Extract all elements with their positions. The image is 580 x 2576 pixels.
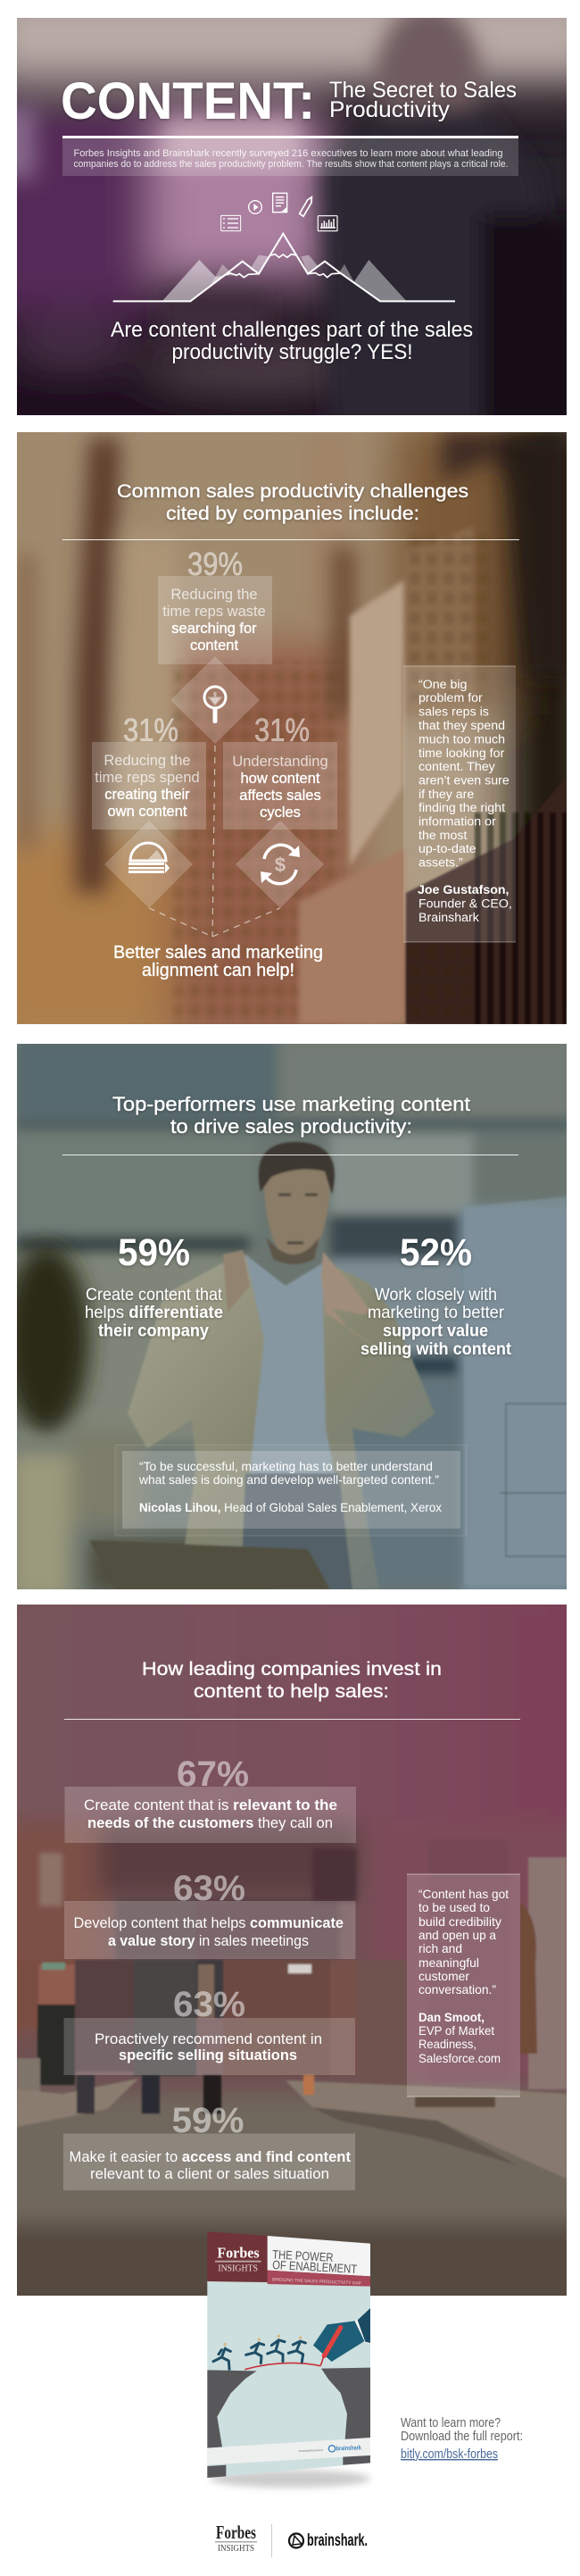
intro text box: Forbes Insights and Brainshark recently surveyed 216 executives to learn more about what leading: [73, 148, 503, 159]
quote: Dan Smoot: Dan Smoot,: [418, 2010, 485, 2024]
stat 67%: Create content that is relevant to the: [84, 1797, 337, 1813]
icon diamond: dollar cycle: [236, 821, 324, 908]
stat 52%: [360, 1231, 512, 1359]
logo: brainshark: brainshark.: [307, 2531, 368, 2550]
quote: Joe Gustafson: Brainshark: [418, 911, 480, 925]
cover header: [207, 2231, 370, 2287]
stat 39% searching for content: searching for: [171, 621, 257, 637]
stat 63% selling situations: specific selling situations: [119, 2047, 297, 2063]
stat 39% searching for content: time reps waste: [162, 604, 266, 620]
panel: common challenges: [17, 432, 567, 1024]
quote: Joe Gustafson: Joe Gustafson,: [418, 883, 509, 897]
logo: Forbes Insights: Forbes: [216, 2522, 256, 2543]
stat 67%: needs of the customers they call on: [87, 1814, 333, 1831]
stat 67%: 67%: [177, 1755, 249, 1794]
cover header: INSIGHTS: [218, 2263, 258, 2273]
stat 52%: Work closely with: [375, 1286, 497, 1305]
stat 63% selling situations: 63%: [173, 1985, 245, 2024]
dashed connectors: [149, 746, 280, 937]
pen hand: [313, 2308, 370, 2365]
invest heading: content to help sales:: [194, 1681, 389, 1702]
stat 59%: 59%: [118, 1231, 190, 1274]
quote: Dan Smoot: meaningful: [418, 1955, 479, 1970]
cover header: Forbes: [217, 2244, 260, 2261]
intro text box: companies do to address the sales productivity problem. The results show that content plays a critical role.: [73, 159, 509, 170]
stat 63% selling situations: [64, 1985, 355, 2075]
stat 52%: marketing to better: [368, 1304, 505, 1322]
quote: Dan Smoot: Salesforce.com: [418, 2051, 501, 2065]
logo: brainshark: [289, 2531, 368, 2550]
stat 63% value story: Develop content that helps communicate: [73, 1914, 344, 1931]
panel: intro hero: [17, 18, 567, 415]
cover shadow: [210, 2470, 370, 2488]
stat 63% value story: 63%: [173, 1869, 245, 1908]
stat 31% creating content: time reps spend: [95, 770, 200, 786]
icon diamond: dollar cycle: $: [275, 854, 286, 876]
quote: Joe Gustafson: “One big: [418, 678, 467, 692]
stat 31% content and sales cycles: 31%: [254, 712, 310, 748]
quote: Dan Smoot: customer: [418, 1969, 469, 1983]
quote: Joe Gustafson: information or: [418, 814, 496, 829]
quote: Dan Smoot: [407, 1874, 520, 2097]
stat 31% creating content: Reducing the: [104, 753, 191, 769]
quote: Joe Gustafson: if they are: [418, 788, 474, 802]
stat 59%: Create content that: [86, 1286, 223, 1305]
cover footer band: brainshark: [336, 2445, 361, 2452]
challenges heading: cited by companies include:: [166, 504, 419, 524]
invest heading: [142, 1659, 442, 1702]
quote: Joe Gustafson: much too much: [418, 732, 505, 746]
challenges photo background: [17, 432, 567, 1024]
stat 31% content and sales cycles: how content: [241, 771, 320, 787]
quote: Joe Gustafson: aren’t even sure: [418, 773, 510, 788]
intro question: [111, 318, 473, 364]
stat 59%: [85, 1231, 223, 1341]
stat 67%: [64, 1755, 356, 1843]
mountains back triangles: [162, 255, 407, 301]
icon: chart: [318, 216, 337, 231]
running figures: [213, 2340, 305, 2369]
invest rule: [64, 1719, 520, 1720]
stat 63% value story: [64, 1869, 355, 1959]
quote: Joe Gustafson: finding the right: [418, 801, 505, 815]
quote: Joe Gustafson: the most: [418, 829, 467, 843]
top performers heading: Top-performers use marketing content: [112, 1093, 470, 1115]
runner heads: [224, 2335, 302, 2346]
stat 31% content and sales cycles: cycles: [260, 804, 301, 821]
logo: Forbes Insights: [215, 2522, 257, 2554]
cover header: OF ENABLEMENT: [272, 2258, 358, 2276]
icon diamond: clock and pencil: [104, 821, 193, 908]
quote: Dan Smoot: “Content has got: [418, 1887, 509, 1901]
stat 59% access and find: Make it easier to access and find content: [70, 2148, 351, 2165]
icon diamond: magnifier: [170, 656, 260, 744]
presenter photo background: [4, 1040, 571, 1603]
download call to action: [401, 2416, 523, 2462]
quote: Joe Gustafson: problem for: [418, 691, 483, 705]
stat 31% content and sales cycles: Understanding: [232, 754, 328, 770]
stat 52%: selling with content: [360, 1340, 512, 1359]
quote: Dan Smoot: build credibility: [418, 1914, 501, 1929]
cover header: BRIDGING THE SALES PRODUCTIVITY GAP: [272, 2277, 362, 2287]
cover body: [207, 2280, 370, 2478]
challenges rule: [62, 539, 519, 540]
quote: Joe Gustafson: [403, 666, 516, 942]
quote: Nicolas Lihou: what sales is doing and develop well-targeted content.”: [138, 1472, 439, 1487]
cover header: THE POWER: [272, 2247, 334, 2264]
intro rule: [62, 136, 518, 138]
quote: Nicolas Lihou: “To be successful, marketing has to better understand: [139, 1459, 433, 1473]
quote: Joe Gustafson: time looking for: [418, 746, 504, 761]
logo divider: [271, 2524, 272, 2557]
title CONTENT: [61, 72, 517, 130]
quote: Joe Gustafson: up-to-date: [418, 842, 476, 856]
alignment message: [113, 943, 323, 980]
stat 31% creating content: creating their: [104, 787, 190, 803]
quote: Joe Gustafson: content. They: [418, 760, 496, 774]
stat 39% searching for content: 39%: [187, 546, 243, 582]
stat 39% searching for content: content: [190, 638, 238, 654]
stat 59%: their company: [98, 1321, 209, 1341]
cover footer band: IN ASSOCIATION WITH: [299, 2448, 323, 2453]
intro blurred photo background: [17, 18, 567, 415]
stat 31% creating content: [92, 712, 206, 829]
quote: Dan Smoot: to be used to: [418, 1900, 490, 1914]
stat 39% searching for content: [158, 546, 272, 664]
quote: Dan Smoot: conversation.”: [418, 1982, 496, 1997]
stat 31% content and sales cycles: [223, 712, 337, 829]
alignment message: Better sales and marketing: [113, 943, 323, 963]
title CONTENT: The Secret to Sales: [329, 78, 517, 103]
invest heading: How leading companies invest in: [142, 1659, 442, 1680]
icon: list: [221, 215, 241, 231]
stat 59%: helps differentiate: [85, 1304, 223, 1322]
icon: play: [249, 201, 261, 213]
stat 59% access and find: 59%: [171, 2101, 244, 2140]
logo: Forbes Insights: INSIGHTS: [218, 2543, 254, 2554]
cover footer band: [207, 2438, 370, 2478]
intro question: Are content challenges part of the sales: [111, 318, 473, 342]
cover cliffs: [207, 2368, 370, 2448]
quote: Joe Gustafson: assets.”: [418, 855, 463, 870]
quote: Nicolas Lihou: Nicolas Lihou, Head of Global Sales Enablement, Xerox: [139, 1500, 442, 1514]
challenges heading: [117, 481, 468, 524]
title CONTENT: Productivity: [329, 97, 451, 122]
stat 31% creating content: 31%: [123, 712, 178, 748]
quote: Joe Gustafson: that they spend: [418, 719, 505, 733]
stat 52%: 52%: [400, 1231, 472, 1274]
alignment message: alignment can help!: [142, 961, 294, 980]
stat 63% selling situations: Proactively recommend content in: [95, 2030, 322, 2047]
quote: Dan Smoot: Readiness,: [418, 2037, 476, 2051]
challenges heading: Common sales productivity challenges: [117, 481, 468, 502]
download call to action: Download the full report:: [401, 2430, 523, 2444]
icon: pencil: [300, 197, 311, 216]
stat 59% access and find: [63, 2101, 355, 2190]
stat 31% content and sales cycles: affects sales: [239, 788, 321, 804]
download call to action: bitly.com/bsk-forbes: [401, 2447, 498, 2462]
stat 59% access and find: relevant to a client or sales situation: [90, 2165, 329, 2182]
intro text box: [62, 138, 518, 176]
quote: Dan Smoot: and open up a: [418, 1928, 496, 1942]
icon group and mountains: [113, 193, 455, 301]
panel: leading companies invest: [0, 1589, 580, 2313]
top performers heading: [112, 1093, 470, 1138]
report cover: [207, 2231, 370, 2488]
title CONTENT: CONTENT:: [61, 72, 315, 130]
download call to action: Want to learn more?: [401, 2416, 501, 2430]
stat 52%: support value: [383, 1321, 488, 1341]
intro question: productivity struggle? YES!: [171, 340, 412, 364]
street photo background: [0, 1589, 580, 2313]
jacket shape: [128, 1253, 435, 1589]
icon: document: [273, 193, 287, 213]
red bridge line: [244, 2363, 320, 2370]
mountain outline: [113, 234, 455, 301]
top performers heading: to drive sales productivity:: [170, 1115, 412, 1138]
quote: Joe Gustafson: Founder & CEO,: [418, 896, 512, 911]
stat 39% searching for content: Reducing the: [170, 587, 258, 603]
stat 31% creating content: own content: [108, 804, 187, 820]
stat 63% value story: a value story in sales meetings: [108, 1932, 309, 1949]
quote: Nicolas Lihou: [115, 1445, 467, 1536]
quote: Dan Smoot: EVP of Market: [418, 2023, 494, 2038]
quote: Joe Gustafson: sales reps is: [418, 705, 489, 720]
quote: Dan Smoot: rich and: [418, 1941, 462, 1955]
panel: top performers: [4, 1040, 571, 1603]
